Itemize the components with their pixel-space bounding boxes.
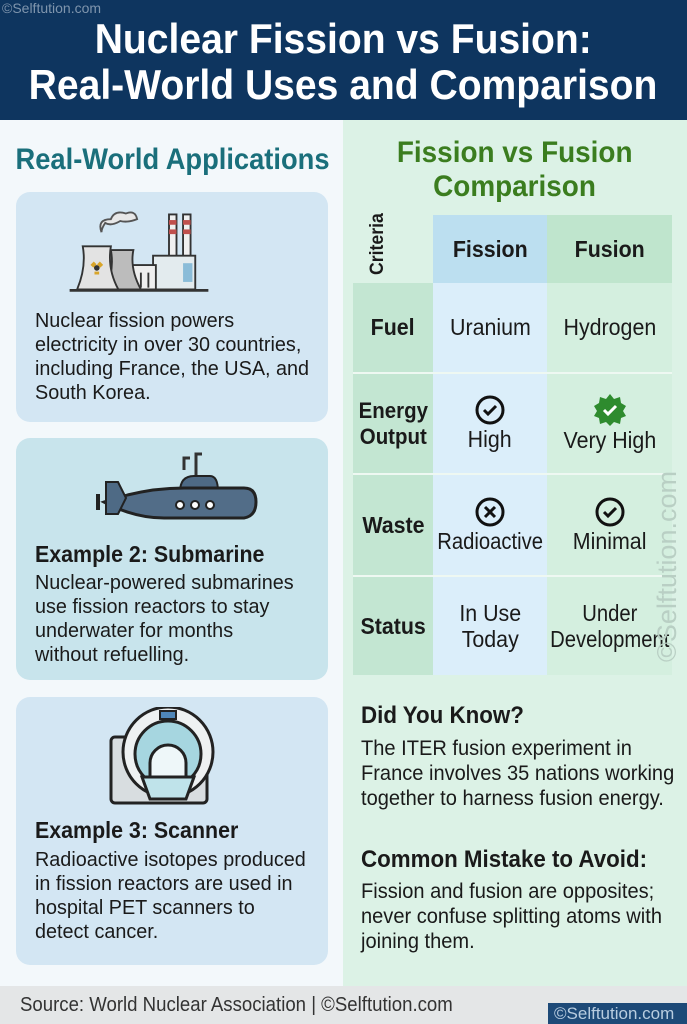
card 2: submarine xyxy=(16,438,328,680)
icon: PET scanner xyxy=(110,707,214,804)
icon: x circle xyxy=(476,498,504,526)
row: energy output: Energy xyxy=(358,398,428,422)
icon: power plant xyxy=(70,212,208,292)
text: common mistake xyxy=(360,880,662,953)
text: card 3: hospital PET scanners to xyxy=(35,897,255,919)
text: did you know: The ITER fusion experiment in xyxy=(361,737,632,760)
footer source text: Source: World Nuclear Association | ©Selftution.com xyxy=(20,994,453,1016)
heading: example 3: Example 3: Scanner xyxy=(35,817,238,843)
comparison table: Hydrogen xyxy=(563,314,656,340)
watermark vertical: ©Selftution.com xyxy=(652,471,682,662)
column backgrounds xyxy=(353,283,433,675)
panel: comparison background xyxy=(343,120,687,986)
text: did you know xyxy=(361,737,674,810)
comparison table: Development xyxy=(550,626,669,652)
text: card 3: detect cancer. xyxy=(35,921,158,943)
heading: real-world applications: Real-World Applications xyxy=(16,143,330,176)
text: card 2 xyxy=(35,572,294,666)
comparison table: Minimal xyxy=(573,528,646,554)
comparison table: In Use xyxy=(459,600,521,626)
comparison table: High xyxy=(468,426,512,452)
heading: fission vs fusion comparison: Fission vs Fusion xyxy=(397,136,633,169)
comparison table: Today xyxy=(461,626,519,652)
icon: submarine xyxy=(96,452,258,520)
text: did you know: France involves 35 nations working xyxy=(361,762,674,785)
row: status: Status xyxy=(360,612,426,638)
text: common mistake: joining them. xyxy=(361,930,475,953)
icon: check circle xyxy=(596,498,624,526)
text: card 1: including France, the USA, and xyxy=(35,358,309,380)
row: energy output xyxy=(358,398,428,448)
header banner xyxy=(0,0,687,120)
icon: check circle xyxy=(476,396,504,424)
title: Real-World Uses and Comparison xyxy=(29,61,658,108)
text: card 2: without refuelling. xyxy=(35,644,189,666)
heading: example 2: Example 2: Submarine xyxy=(35,541,264,567)
text: did you know: together to harness fusion energy. xyxy=(361,787,664,810)
header: fission: Fission xyxy=(453,236,527,262)
heading: did you know: Did You Know? xyxy=(361,702,524,729)
comparison table: Radioactive xyxy=(437,528,543,554)
comparison table: Under xyxy=(582,600,637,626)
heading: common mistake: Common Mistake to Avoid: xyxy=(361,846,647,873)
text: card 2: Nuclear-powered submarines xyxy=(35,572,294,594)
text: common mistake: never confuse splitting atoms with xyxy=(361,905,662,928)
text: card 3 xyxy=(35,849,306,943)
text: card 1: Nuclear fission powers xyxy=(35,310,234,332)
title xyxy=(29,15,658,108)
comparison table: Uranium xyxy=(450,314,530,340)
text: common mistake: Fission and fusion are opposites; xyxy=(361,880,654,903)
watermark top-left: ©Selftution.com xyxy=(2,0,101,16)
text: card 1 xyxy=(35,310,309,404)
comparison table: Very High xyxy=(563,427,656,453)
row: energy output: Output xyxy=(359,424,427,448)
text: card 2: use fission reactors to stay xyxy=(35,596,269,618)
card 3: scanner xyxy=(16,697,328,965)
row: waste: Waste xyxy=(362,512,424,538)
heading: fission vs fusion comparison xyxy=(397,136,633,203)
header: criteria: Criteria xyxy=(367,213,388,275)
heading: fission vs fusion comparison: Comparison xyxy=(434,170,596,203)
icon: green badge check xyxy=(594,394,626,426)
comparison table xyxy=(353,213,672,675)
text: card 1: electricity in over 30 countries, xyxy=(35,334,301,356)
row: fuel: Fuel xyxy=(371,314,415,340)
header: fusion: Fusion xyxy=(574,236,645,262)
card 1: power plant xyxy=(16,192,328,422)
text: card 2: underwater for months xyxy=(35,620,233,642)
footer badge: ©Selftution.com xyxy=(554,1004,674,1023)
title: Nuclear Fission vs Fusion: xyxy=(95,15,592,62)
text: card 1: South Korea. xyxy=(35,382,151,404)
text: card 3: in fission reactors are used in xyxy=(35,873,293,895)
text: card 3: Radioactive isotopes produced xyxy=(35,849,306,871)
footer xyxy=(0,986,687,1024)
